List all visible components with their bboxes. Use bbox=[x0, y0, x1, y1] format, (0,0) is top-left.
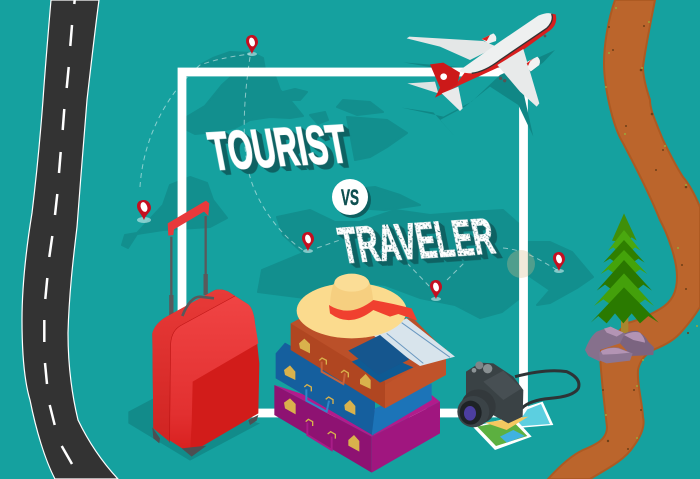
vs badge bbox=[332, 179, 371, 218]
pin lower centre bbox=[430, 280, 442, 301]
near engine bbox=[527, 57, 540, 72]
pin centre left bbox=[302, 232, 314, 253]
camera lens bbox=[461, 389, 496, 424]
ticket stripes bbox=[387, 323, 450, 363]
side panel bbox=[152, 289, 235, 442]
far wing bbox=[407, 37, 497, 60]
tree foliage bbox=[591, 213, 659, 323]
road bbox=[22, 0, 118, 479]
magenta buckles bbox=[284, 398, 359, 452]
tree trunk bbox=[621, 317, 628, 333]
camera top dials bbox=[475, 361, 483, 369]
brown left face bbox=[291, 323, 385, 408]
world map bbox=[122, 52, 593, 318]
blue case bbox=[276, 343, 432, 436]
window stripe bbox=[472, 14, 552, 73]
camera strap bbox=[515, 371, 579, 408]
brown right face bbox=[385, 348, 446, 408]
landing gear bbox=[499, 35, 546, 82]
map photo bbox=[473, 417, 532, 450]
road surface bbox=[22, 0, 118, 479]
magenta clips bbox=[306, 419, 335, 439]
magenta case bbox=[274, 385, 440, 473]
passport under bbox=[352, 352, 413, 383]
telescopic rods bbox=[171, 216, 206, 315]
blue clips bbox=[304, 385, 333, 404]
hat brim bbox=[297, 283, 407, 338]
fuselage bbox=[460, 13, 552, 73]
magenta top bbox=[274, 385, 440, 437]
title: traveler: TRAVELER bbox=[334, 208, 499, 274]
tail logo bbox=[440, 73, 447, 80]
translucent sun spot bbox=[507, 250, 535, 278]
boarding tickets bbox=[370, 318, 455, 366]
camera and photos bbox=[457, 361, 579, 450]
road centre dashes bbox=[44, 0, 75, 464]
hat crown bbox=[330, 276, 373, 314]
ticket sheet bbox=[370, 318, 455, 366]
rock front bbox=[599, 347, 633, 363]
rock right bbox=[620, 331, 654, 356]
far tailplane bbox=[407, 82, 438, 93]
near tailplane bbox=[442, 87, 463, 111]
blue right face bbox=[372, 383, 432, 436]
pin right bbox=[553, 252, 565, 273]
pin left bbox=[137, 200, 151, 223]
white frame bbox=[182, 72, 524, 413]
title: tourist: TOURIST bbox=[204, 115, 352, 182]
sun hat bbox=[297, 274, 417, 338]
telescopic handle grip bbox=[168, 201, 209, 236]
path pebbles bbox=[602, 25, 689, 450]
front highlight bbox=[170, 296, 258, 453]
suitcase body bbox=[152, 289, 259, 453]
rock left bbox=[585, 327, 625, 362]
magenta right face bbox=[372, 402, 440, 473]
red rolling suitcase bbox=[128, 201, 260, 461]
dashed flight routes bbox=[140, 54, 557, 287]
badge shadow bbox=[335, 182, 371, 218]
suitcase stack bbox=[274, 274, 455, 473]
passports bbox=[348, 335, 413, 383]
magenta handle bbox=[307, 423, 332, 450]
rocks bbox=[585, 327, 654, 363]
blue photo bbox=[513, 402, 553, 428]
passport cover bbox=[348, 335, 409, 375]
camera hump bbox=[483, 371, 522, 400]
camera body bbox=[466, 363, 523, 423]
pin top bbox=[246, 35, 258, 56]
path surface bbox=[548, 0, 700, 479]
rock highlights bbox=[601, 327, 645, 355]
carry handle bbox=[182, 297, 214, 316]
suitcase shadow bbox=[128, 398, 260, 461]
plane shadow bbox=[402, 50, 555, 138]
badge circle bbox=[332, 179, 368, 215]
badge text: VS bbox=[341, 185, 359, 210]
tail fin bbox=[430, 63, 460, 98]
brown top bbox=[291, 318, 446, 387]
blue handle bbox=[306, 389, 329, 412]
wheels bbox=[152, 415, 258, 457]
brown clips bbox=[319, 358, 348, 377]
near wing bbox=[497, 49, 539, 107]
tree bbox=[591, 213, 659, 333]
dirt path bbox=[548, 0, 700, 479]
seam bbox=[169, 296, 235, 442]
brown buckles bbox=[299, 339, 371, 389]
airplane bbox=[402, 13, 556, 138]
brown case bbox=[291, 318, 446, 408]
brown handle bbox=[322, 362, 345, 384]
crown top bbox=[334, 274, 369, 292]
blue buckles bbox=[284, 365, 355, 415]
red belly bbox=[435, 13, 556, 98]
blue left face bbox=[276, 343, 375, 436]
location pins bbox=[137, 35, 565, 301]
magenta left face bbox=[274, 385, 372, 473]
path moss specks bbox=[605, 7, 698, 439]
far engine bbox=[482, 33, 496, 44]
hat band and ribbon bbox=[329, 300, 417, 321]
